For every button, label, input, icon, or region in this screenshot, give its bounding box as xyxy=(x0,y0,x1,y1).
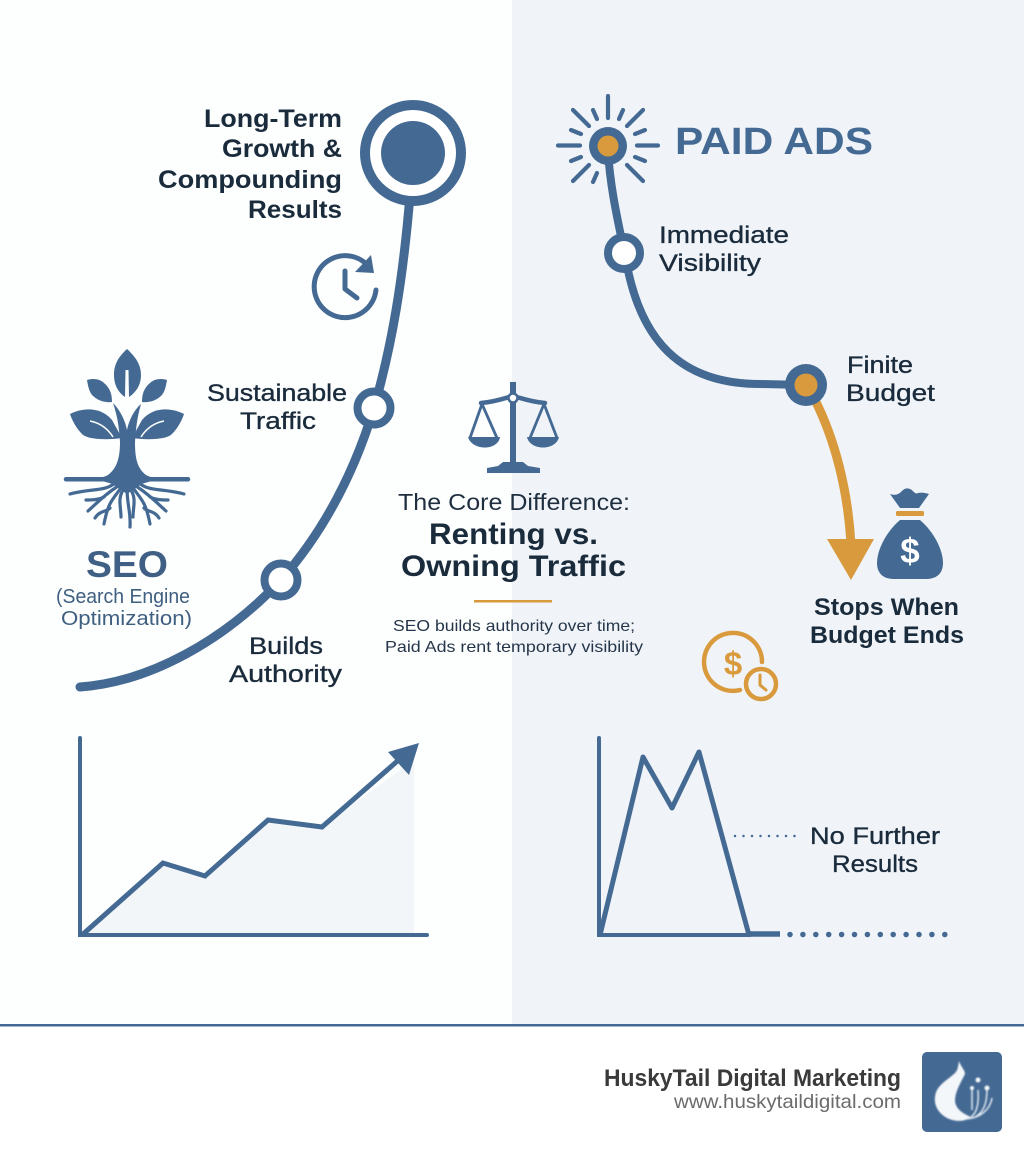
text: core difference summary: Paid Ads rent temporary visibility xyxy=(385,639,643,656)
SEO growth curve xyxy=(80,195,410,687)
chart: SEO growth xyxy=(80,738,427,935)
paid ads curve xyxy=(608,150,806,385)
heading: long-term growth: Compounding xyxy=(158,166,342,194)
label: stops when budget ends: Budget Ends xyxy=(810,622,964,649)
label: finite budget: Finite xyxy=(847,352,913,379)
label: finite budget: Budget xyxy=(846,380,935,407)
icon: coin with clock xyxy=(704,633,776,699)
label: builds authority xyxy=(229,633,342,688)
heading: long-term growth: Long-Term xyxy=(204,105,342,133)
icon: tree with roots xyxy=(64,349,190,527)
icon: sunburst node xyxy=(558,96,658,182)
heading: core difference: Owning Traffic xyxy=(401,550,626,583)
label: immediate visibility xyxy=(659,222,789,277)
icon: money bag xyxy=(877,488,943,579)
label: SEO: SEO xyxy=(86,544,168,585)
heading: long-term growth xyxy=(158,105,342,224)
label: stops when budget ends: Stops When xyxy=(814,594,959,621)
label: SEO: Optimization) xyxy=(61,608,192,630)
text: core difference summary xyxy=(385,618,643,656)
heading: core difference: Renting vs. xyxy=(429,518,598,551)
arrow: budget drop xyxy=(815,400,874,580)
label: immediate visibility: Immediate xyxy=(659,222,789,249)
icon: balance scales xyxy=(468,382,559,473)
heading: long-term growth: Growth & xyxy=(222,135,342,163)
text: core difference summary: SEO builds authority over time; xyxy=(393,618,635,635)
icon: coin with clock: $ xyxy=(724,645,742,682)
panel: paid ads background xyxy=(512,0,1024,1024)
label: sustainable traffic xyxy=(207,380,347,435)
node: sustainable traffic xyxy=(358,392,390,424)
heading: core difference: The Core Difference: xyxy=(398,489,630,515)
label: sustainable traffic: Sustainable xyxy=(207,380,347,407)
label: stops when budget ends xyxy=(810,594,964,649)
label: builds authority: Authority xyxy=(229,661,342,688)
label: SEO: (Search Engine xyxy=(56,586,190,608)
heading: long-term growth: Results xyxy=(248,196,342,224)
footer xyxy=(0,1024,1024,1154)
footer url: www.huskytaildigital.com xyxy=(673,1091,901,1113)
accent divider xyxy=(474,600,552,602)
chart: paid ads spike xyxy=(599,738,948,935)
logo xyxy=(922,1052,1002,1132)
heading: core difference xyxy=(398,489,630,583)
node: builds authority xyxy=(264,564,298,596)
node: finite budget xyxy=(785,364,827,406)
icon: money bag: $ xyxy=(900,532,920,571)
icon: clock with arrow xyxy=(314,255,376,318)
heading: paid ads: PAID ADS xyxy=(675,121,873,163)
node: long-term growth xyxy=(365,105,461,201)
label: builds authority: Builds xyxy=(249,633,323,660)
node: immediate visibility xyxy=(608,237,640,269)
label: SEO xyxy=(56,544,192,630)
label: no further results xyxy=(810,823,940,878)
label: sustainable traffic: Traffic xyxy=(240,408,316,435)
dotted leader xyxy=(735,835,798,837)
label: finite budget xyxy=(846,352,935,407)
label: immediate visibility: Visibility xyxy=(659,250,761,277)
footer brand name: HuskyTail Digital Marketing xyxy=(604,1065,901,1092)
label: no further results: No Further xyxy=(810,823,940,850)
label: no further results: Results xyxy=(832,851,918,878)
